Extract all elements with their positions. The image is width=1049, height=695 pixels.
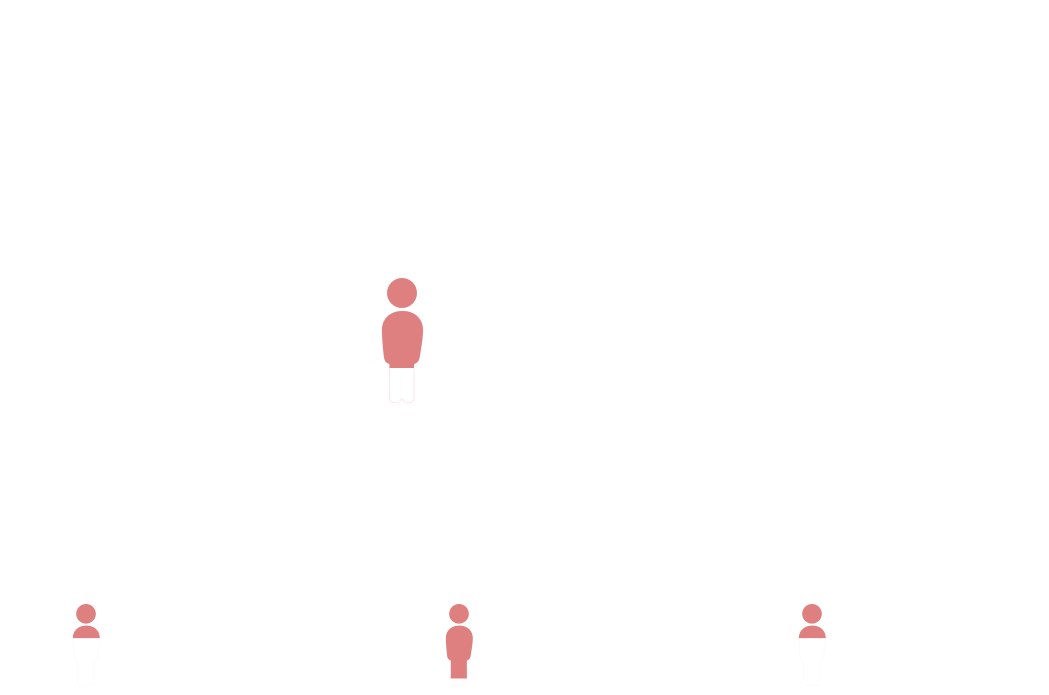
small person icon: left bbox=[72, 604, 100, 638]
large person icon bbox=[382, 278, 423, 403]
small person icon: middle bbox=[446, 604, 473, 686]
small person icon: right bbox=[798, 604, 826, 638]
